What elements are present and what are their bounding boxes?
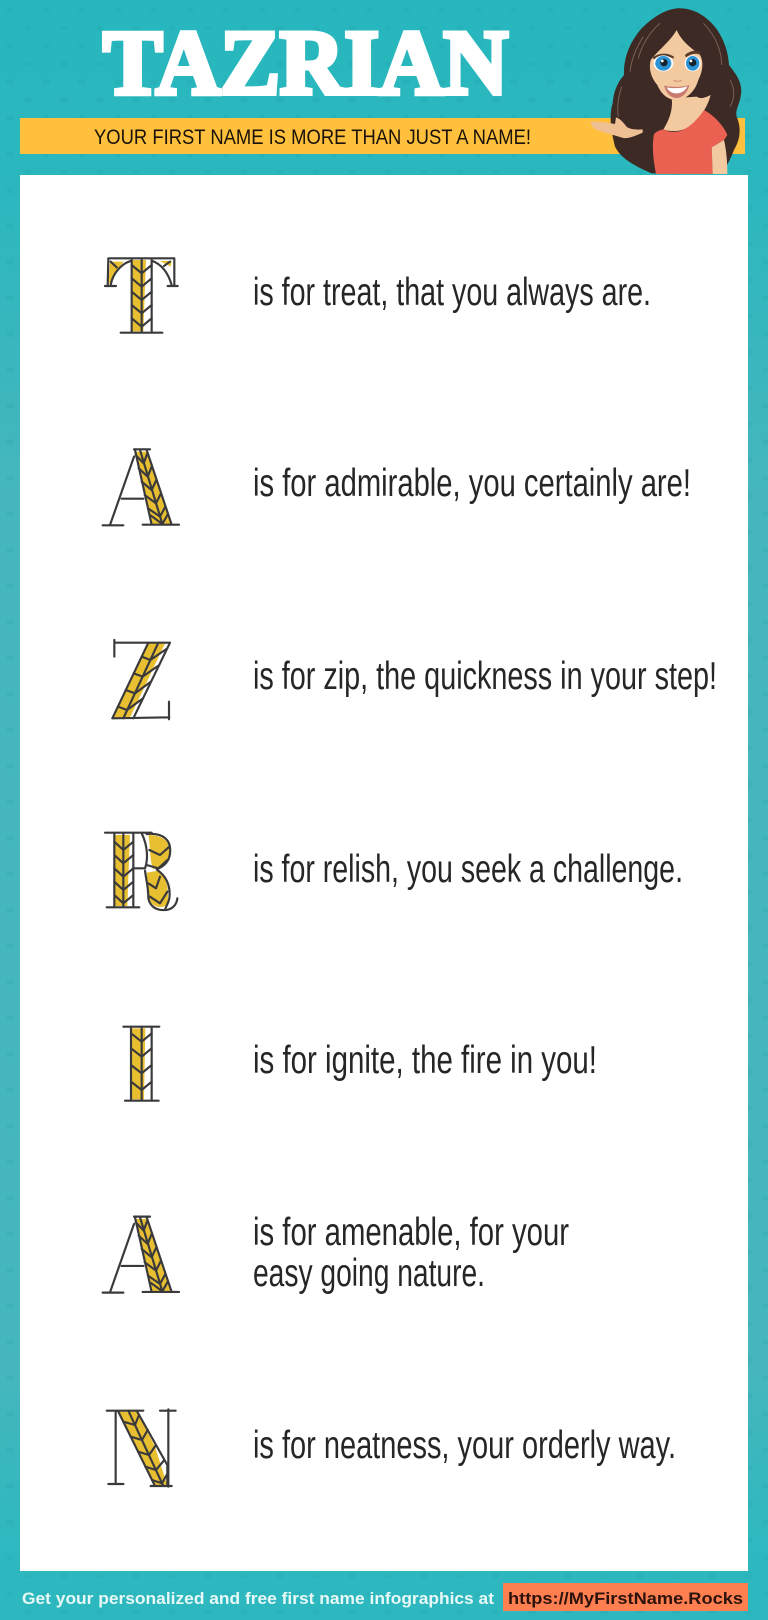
letter N: [107, 1409, 176, 1487]
footer url badge: [503, 1583, 748, 1611]
letter I: [123, 1027, 159, 1101]
yellow tagline band: [20, 118, 745, 154]
letter A (second): [103, 1217, 179, 1293]
footer url badge: https://MyFirstName.Rocks: [508, 1589, 743, 1608]
letter T: [105, 258, 178, 333]
letter Z: [112, 640, 170, 719]
row text: A second, two lines: easy going nature.: [253, 1252, 485, 1295]
row text: A second, two lines: is for amenable, for your: [253, 1211, 569, 1254]
illustration: cartoon woman presenting: [590, 8, 741, 174]
footer promo text: Get your personalized and free first name infographics at: [22, 1589, 494, 1608]
letter A: [103, 449, 179, 525]
title: TAZRIAN: [103, 12, 508, 114]
letter R: [105, 833, 177, 910]
row text: I: is for ignite, the fire in you!: [253, 1039, 597, 1082]
tagline: YOUR FIRST NAME IS MORE THAN JUST A NAME!: [94, 125, 531, 149]
